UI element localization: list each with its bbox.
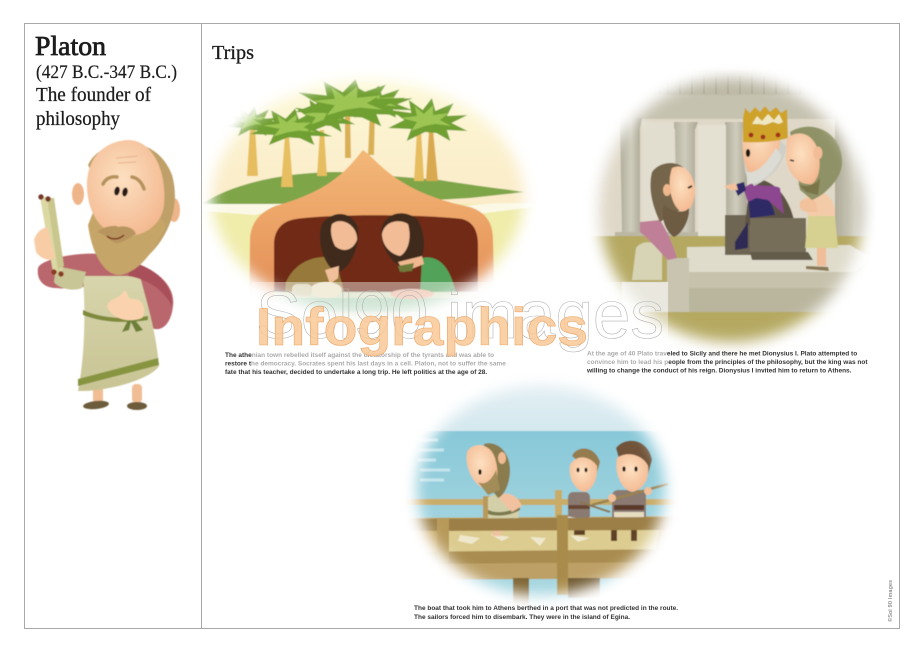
caption: Egina line 2: The sailors forced him to disembark. They were in the island of Egina. <box>414 614 630 621</box>
right figure <box>786 127 842 271</box>
caption: Athens line 2: restore t <box>225 360 252 368</box>
head <box>87 140 164 236</box>
sailor 1 <box>568 448 600 535</box>
heading: Trips: Trips <box>212 42 254 64</box>
scrolls <box>40 197 63 272</box>
hair <box>650 163 686 222</box>
face <box>786 134 820 184</box>
tunic <box>78 276 159 391</box>
beard <box>663 205 689 237</box>
back rail <box>400 499 685 505</box>
throne front <box>750 218 806 252</box>
ears <box>72 183 84 205</box>
hill <box>200 172 525 205</box>
caption: Sicily line 2: eople from the principles of the philosophy, but the king was not <box>668 359 868 366</box>
fields <box>210 204 526 275</box>
copyright note: ©Sol 90 Images <box>887 580 894 622</box>
tent <box>249 150 494 296</box>
caption: Athens: The athe <box>225 352 252 359</box>
front rail and posts <box>400 517 685 531</box>
illustration: port scene <box>407 382 675 606</box>
tunic <box>805 216 838 248</box>
title block: The founder of <box>36 85 151 106</box>
raised sleeve <box>54 266 86 290</box>
left figure <box>285 214 358 295</box>
raised hand <box>34 228 55 260</box>
tunic <box>632 242 662 280</box>
hair <box>790 127 842 200</box>
monk figure <box>467 443 522 536</box>
steps <box>687 245 872 272</box>
brows and forehead lines <box>103 177 117 184</box>
title block <box>35 31 177 130</box>
title block: philosophy <box>36 109 120 130</box>
caption: Sicily: eled to Sicily and there he met Dionysius I. Plato attempted to <box>667 350 857 358</box>
cape over shoulder <box>128 262 172 306</box>
caption: Sicily line 2: convince him to lead his p <box>587 359 668 366</box>
illustration: tent scene <box>203 76 532 318</box>
left figure <box>632 163 695 280</box>
floor <box>592 236 870 351</box>
caption: Egina: The boat that took him to Athens berthed in a port that was not predicted in the route. <box>414 605 678 612</box>
throne back <box>725 215 753 255</box>
watermark: Sol90 images: Sol90 images <box>256 277 664 353</box>
hand on chest <box>107 290 144 320</box>
illustration: Plato character <box>34 140 180 410</box>
caption: Athens line 2: he democracy. Socrates spent his last days in a cell. Platon, not to suffer the same <box>251 360 506 368</box>
caption: Athens: nian town rebelled itself against the dictatorship of the tyrants and was able to <box>252 352 494 359</box>
title block: (427 B.C.-347 B.C.) <box>36 62 177 83</box>
columns <box>620 118 642 232</box>
moustache and mouth <box>97 226 136 243</box>
hair <box>88 143 175 262</box>
beard <box>88 205 166 275</box>
cape <box>38 254 173 329</box>
table <box>274 291 474 315</box>
caption: Sicily: At the age of 40 Plato trav <box>587 350 667 358</box>
entablature <box>660 74 802 96</box>
pink cloak <box>640 220 677 260</box>
right figure <box>381 213 456 296</box>
caption: Sicily line 3: willing to change the conduct of his reign. Dionysius I invited him to return to Athens. <box>586 368 852 374</box>
torso and arm <box>806 191 835 216</box>
caption: Athens line 3: fate that his teacher, decided to undertake a long trip. He left politics at the age of 28. <box>225 369 487 376</box>
palm trees <box>226 79 468 187</box>
king <box>724 106 795 225</box>
illustration: throne scene <box>591 70 872 352</box>
watermark band <box>252 282 668 346</box>
tent opening <box>274 214 478 292</box>
sailor 2 <box>611 441 652 541</box>
eyes <box>113 186 121 196</box>
watermark: Infographics: Infographics <box>256 298 588 357</box>
deck <box>413 516 669 552</box>
legs <box>817 246 826 266</box>
spears and hands <box>592 484 668 505</box>
legs and sandals <box>93 386 103 404</box>
face <box>670 167 695 212</box>
title block: Platon <box>35 31 107 61</box>
